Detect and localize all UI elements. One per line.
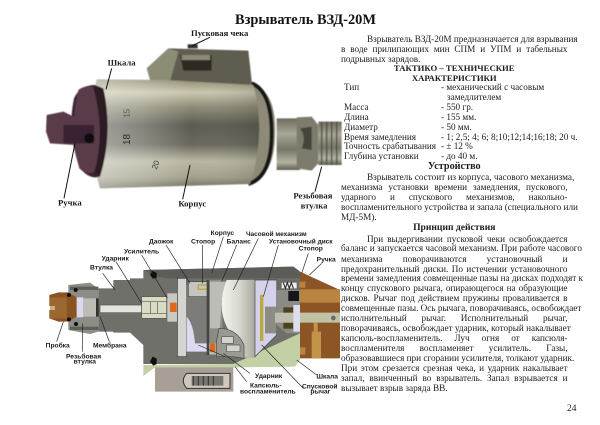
cutaway labels: Усилитель <box>124 248 159 255</box>
construction text: МД-5М). <box>341 212 377 222</box>
operating principle text: времени замедления совмещенные пазы на дисках подходят к <box>341 273 583 283</box>
operating principle text: воспламенителя воспламеняет усилитель. Газы, <box>341 343 568 353</box>
cutaway: brown handle <box>300 272 340 358</box>
specifications table: - 50 мм. <box>441 122 472 132</box>
specifications table: Время замедления <box>344 132 416 142</box>
page number: 24 <box>567 404 576 414</box>
operating principle text: При выдергивании пусковой чеки освобождается <box>367 234 568 244</box>
cutaway: base clip <box>155 367 233 392</box>
operating principle text: дисков. Рычаг под действием пружины проваливается в <box>341 293 568 303</box>
label: Резьбовая втулка <box>293 190 333 210</box>
label: Пусковая чека: Пусковая чека <box>191 28 249 38</box>
heading: specifications <box>394 63 515 82</box>
specifications table: замедлителем <box>447 92 501 102</box>
intro text: подрывных зарядов. <box>341 54 420 64</box>
heading: specifications: ХАРАКТЕРИСТИКИ <box>412 72 497 82</box>
intro text <box>341 34 578 64</box>
cutaway: central block <box>177 278 187 357</box>
label: Ручка: Ручка <box>58 197 82 207</box>
operating principle text <box>341 234 583 393</box>
construction text: воспламенительного устройства и запала (специального или <box>341 202 578 212</box>
cutaway labels <box>46 230 338 396</box>
cutaway labels: Баланс <box>227 238 251 245</box>
operating principle text: совмещенные пазы. Ось рычага, поворачиваясь, освобождает <box>341 303 581 313</box>
construction text: механизма установки времени замедления, пускового, <box>341 182 568 192</box>
photo of the fuze with labels <box>46 28 342 210</box>
specifications table: Глубина установки <box>344 151 419 161</box>
construction text <box>341 172 578 222</box>
photo: leader lines <box>64 37 322 199</box>
cutaway labels: Капсюль- <box>250 383 282 390</box>
heading: operating principle: Принцип действия <box>413 222 495 233</box>
operating principle text: исполнительный рычаг. Исполнительный рычаг, <box>341 313 568 323</box>
cutaway labels: Пробка <box>46 342 70 350</box>
cutaway labels: Ручка <box>317 256 336 263</box>
photo: scale numbers: 20 <box>150 159 162 171</box>
cutaway labels: Шкала <box>316 374 338 381</box>
cutaway labels: Установочный диск <box>269 237 333 245</box>
specifications table: Тип <box>344 82 359 92</box>
construction text: ударного и спускового механизмов, накольно- <box>341 192 568 202</box>
cutaway labels: Даожок <box>149 238 174 245</box>
cutaway labels: Стопор <box>299 246 323 253</box>
photo: scale numbers <box>122 108 162 171</box>
operating principle text: механизма поворачиваются установочный и <box>341 254 568 264</box>
cutaway: clock mechanism <box>222 280 255 358</box>
cutaway: setting disc <box>255 280 277 357</box>
photo: fuze body <box>46 44 342 188</box>
cutaway: plug <box>49 292 77 322</box>
operating principle text: баланс и запускается часовой механизм. При работе часового <box>341 243 582 253</box>
label: Резьбовая втулка: Резьбовая <box>293 190 333 200</box>
specifications table: - 1; 2,5; 4; 6; 8;10;12;14;16;18; 20 ч. <box>441 132 578 142</box>
specifications table: Точность срабатывания <box>344 141 436 151</box>
cutaway diagram <box>46 230 340 396</box>
specifications table: - ± 12 % <box>441 141 473 151</box>
cutaway: green scale section <box>143 333 300 376</box>
specifications table: Длина <box>344 112 369 122</box>
title: Взрыватель ВЗД-20М <box>235 12 376 28</box>
operating principle text: вызывает взрыв заряда ВВ. <box>341 382 448 392</box>
specifications table <box>344 82 578 161</box>
cutaway labels: Стопор <box>191 238 215 245</box>
specifications table: - 550 гр. <box>441 102 473 112</box>
cutaway labels: Мембрана <box>93 342 127 350</box>
specifications table: Масса <box>344 102 369 112</box>
cutaway drawing <box>49 267 340 392</box>
cutaway labels: рычаг <box>310 389 331 396</box>
operating principle text: капсюль-воспламенитель. Луч огня от капсюля- <box>341 333 568 343</box>
cutaway labels: воспламенитель <box>240 389 296 396</box>
operating principle text: концу спускового рычага, опирающегося на образующие <box>341 283 568 293</box>
intro text: в воде прилипающих мин СПМ и УПМ и табельных <box>341 44 568 54</box>
heading: specifications: ТАКТИКО – ТЕХНИЧЕСКИЕ <box>394 63 515 73</box>
cutaway labels: Часовой механизм <box>246 230 307 238</box>
specifications table: - 155 мм. <box>441 112 476 122</box>
cutaway: main housing <box>98 267 300 364</box>
cutaway: striker channel <box>100 305 142 313</box>
cutaway labels: Ударник <box>255 373 283 380</box>
operating principle text: образовавшиеся при сгорании усилителя, толкают ударник. <box>341 353 574 363</box>
heading: construction: Устройство <box>428 160 481 172</box>
construction text: Взрыватель состоит из корпуса, часового механизма, <box>367 172 574 182</box>
operating principle text: предохранительный диски. По истечении установочного <box>341 264 568 274</box>
specifications table: Диаметр <box>344 122 378 132</box>
photo: scale numbers: 18 <box>122 133 133 145</box>
label: Корпус: Корпус <box>178 198 206 208</box>
cutaway labels: Ударник <box>102 256 129 263</box>
cutaway: leader lines <box>57 237 322 388</box>
cutaway labels: Резьбовая <box>66 353 101 361</box>
intro text: Взрыватель ВЗД-20М предназначается для взрывания <box>367 34 578 44</box>
operating principle text: При этом срезается срезная чека, и ударник накалывает <box>341 362 568 372</box>
specifications table: - до 40 м. <box>441 151 478 161</box>
cutaway labels: Втулка <box>90 264 113 271</box>
label: Шкала: Шкала <box>108 57 136 67</box>
photo: scale numbers: 15 <box>122 108 131 118</box>
operating principle text: запал, ввинченный во взрыватель. Запал взрывается и <box>341 372 568 382</box>
label: Резьбовая втулка: втулка <box>301 200 328 210</box>
cutaway labels: Корпус <box>211 230 234 237</box>
specifications table: - механический с часовым <box>441 82 544 92</box>
cutaway labels: Спусковой <box>302 383 338 391</box>
operating principle text: поворачиваясь, освобождает ударник, который накалывает <box>341 323 571 333</box>
cutaway labels: втулка <box>74 359 96 366</box>
